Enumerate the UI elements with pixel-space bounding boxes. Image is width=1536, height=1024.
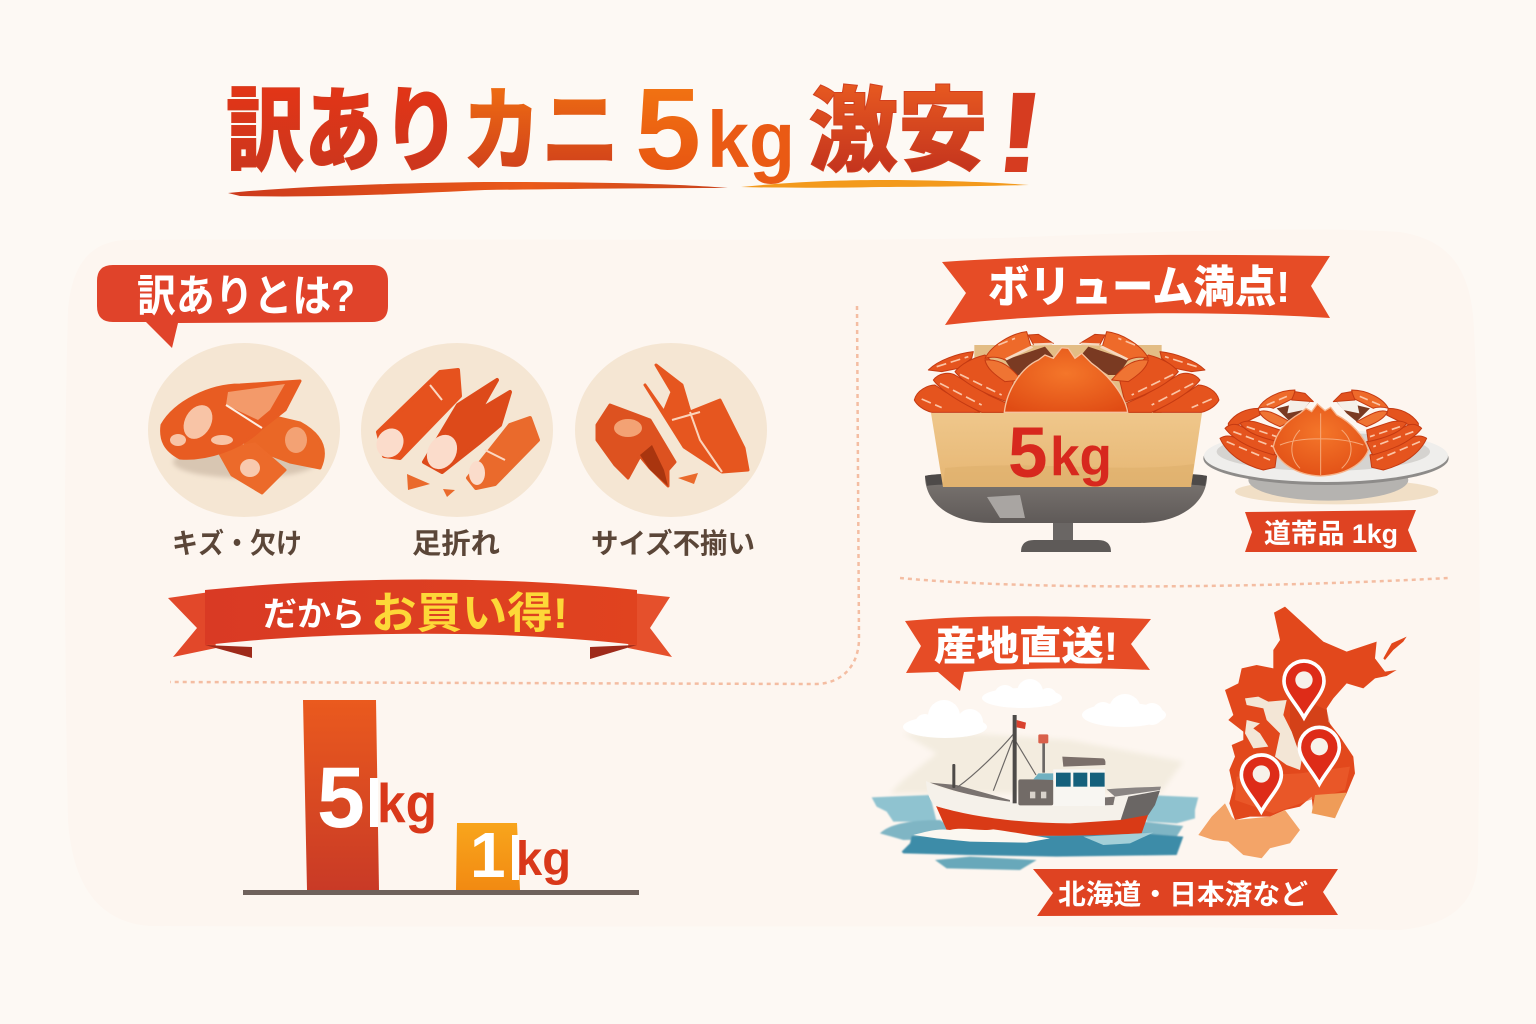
map pins	[1241, 661, 1339, 812]
large crab carapace	[1004, 348, 1128, 412]
title exclamation mark: !	[987, 69, 1053, 197]
title text: 5kg: 5	[635, 64, 701, 194]
panel: main soft background	[65, 230, 1480, 930]
icon: broken crab legs	[361, 343, 553, 517]
bar: 5kg	[303, 700, 379, 890]
crab pile	[914, 332, 1219, 413]
ribbon banner: 北海道・日本済など: 北海道・日本済など	[1058, 879, 1308, 910]
ribbon banner: 産地直送!: 産地直送!	[934, 625, 1118, 669]
cardboard box	[931, 413, 1202, 487]
title text: 訳あり: 訳あり	[226, 81, 460, 183]
illustration: 5kg crab box on a scale	[914, 332, 1219, 552]
cabin	[1018, 779, 1053, 805]
bar chart: 5kg vs 1kg: kg	[377, 772, 437, 834]
map: island	[1383, 637, 1407, 660]
boat stern and deck	[1121, 791, 1160, 820]
speech bubble: 訳ありとは?: 訳ありとは?	[137, 272, 355, 321]
ribbon banner: だからお買い得!	[168, 580, 672, 659]
bar: 1kg	[456, 823, 520, 890]
ribbon tails	[168, 592, 216, 657]
ribbon banner: だからお買い得!: お買い得!	[371, 590, 568, 638]
scale	[925, 472, 1207, 552]
bar chart: 5kg vs 1kg	[243, 700, 639, 895]
dashed divider: left area	[170, 306, 859, 684]
dashed divider: right area	[900, 578, 1448, 586]
boat hull: white upper part	[926, 781, 1161, 823]
small crab carapace	[1273, 404, 1368, 476]
illustration: 5kg crab box on a scale: kg	[1050, 425, 1112, 487]
map: peach regions	[1198, 803, 1300, 858]
speech bubble: 訳ありとは?	[97, 265, 388, 348]
ribbon banner: 北海道・日本済など	[1033, 869, 1338, 916]
title text: 激安: 激安	[808, 81, 988, 183]
crumbs	[407, 474, 455, 497]
map: landmass	[1225, 607, 1397, 820]
map: inland sea	[1245, 697, 1302, 770]
ribbon banner: 産地直送!	[905, 616, 1151, 691]
title	[226, 64, 1053, 197]
icon: scratched and chipped crab shell	[148, 343, 340, 517]
wake	[913, 829, 1050, 843]
sea	[872, 795, 1198, 870]
bar chart: 5kg vs 1kg: kg	[516, 833, 571, 886]
label: 足折れ: 足折れ	[412, 528, 500, 559]
boat hull: red lower part	[936, 806, 1149, 836]
tag: 道芾品 1kg: 道芾品 1kg	[1264, 519, 1398, 549]
clouds	[903, 679, 1166, 738]
title: kg	[707, 95, 795, 184]
radar post	[1042, 743, 1045, 773]
tag: 道芾品 1kg	[1245, 510, 1417, 552]
label: サイズ不揃い: サイズ不揃い	[591, 527, 755, 559]
mast and rigging	[957, 733, 1036, 791]
box label: 5kg: 5	[1008, 414, 1048, 493]
map of northern Japan with pins	[1198, 607, 1407, 858]
icon: uneven crab sizes	[575, 343, 767, 517]
bar chart: 5kg vs 1kg: 1	[470, 819, 506, 891]
title text: カニ: カニ	[462, 81, 620, 183]
haze behind boat	[890, 733, 1183, 793]
illustration: 1kg crab on a plate	[1203, 390, 1449, 504]
bar chart: 5kg vs 1kg: 5	[317, 750, 365, 846]
flag	[1017, 720, 1026, 729]
label: キズ・欠け: キズ・欠け	[172, 527, 302, 559]
ribbon text: だから	[263, 596, 365, 634]
illustration: fishing boat	[872, 715, 1198, 870]
ribbon banner: ボリューム満点!: ボリューム満点!	[988, 263, 1290, 312]
ribbon banner: ボリューム満点!	[942, 255, 1330, 325]
title underline brush stroke	[228, 182, 728, 196]
map: shading	[1290, 693, 1333, 747]
chart baseline	[243, 890, 639, 895]
